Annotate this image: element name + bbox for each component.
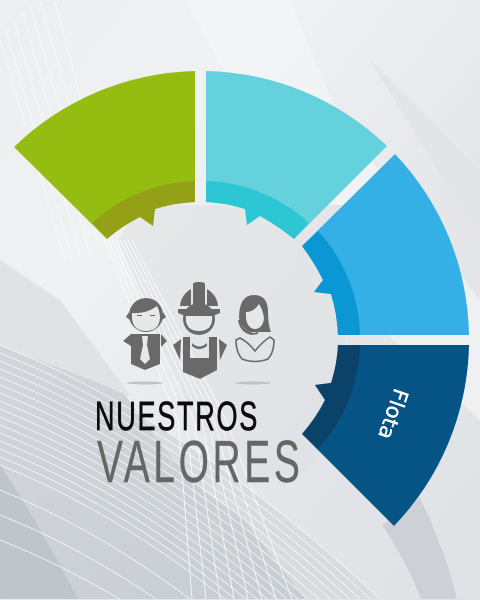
segment: green <box>14 71 195 239</box>
shadow: businessman <box>127 382 163 384</box>
title: NUESTROS: NUESTROS <box>95 395 259 439</box>
icon: call centre woman <box>236 295 274 362</box>
segment: green inner band <box>92 181 195 239</box>
segment: blue <box>302 154 469 335</box>
title: VALORES: VALORES <box>97 429 303 495</box>
segment: navy <box>302 345 469 526</box>
icon: businessman <box>123 298 167 370</box>
icon: construction worker <box>173 282 227 379</box>
chart: semicircular segments <box>14 71 469 526</box>
shadow: woman <box>235 382 271 384</box>
segment: cyan <box>206 71 387 239</box>
segment: blue inner band <box>302 231 360 335</box>
segment: cyan inner band <box>206 181 309 239</box>
segment: navy inner band <box>302 345 360 449</box>
label: Flota: Flota <box>373 386 413 442</box>
